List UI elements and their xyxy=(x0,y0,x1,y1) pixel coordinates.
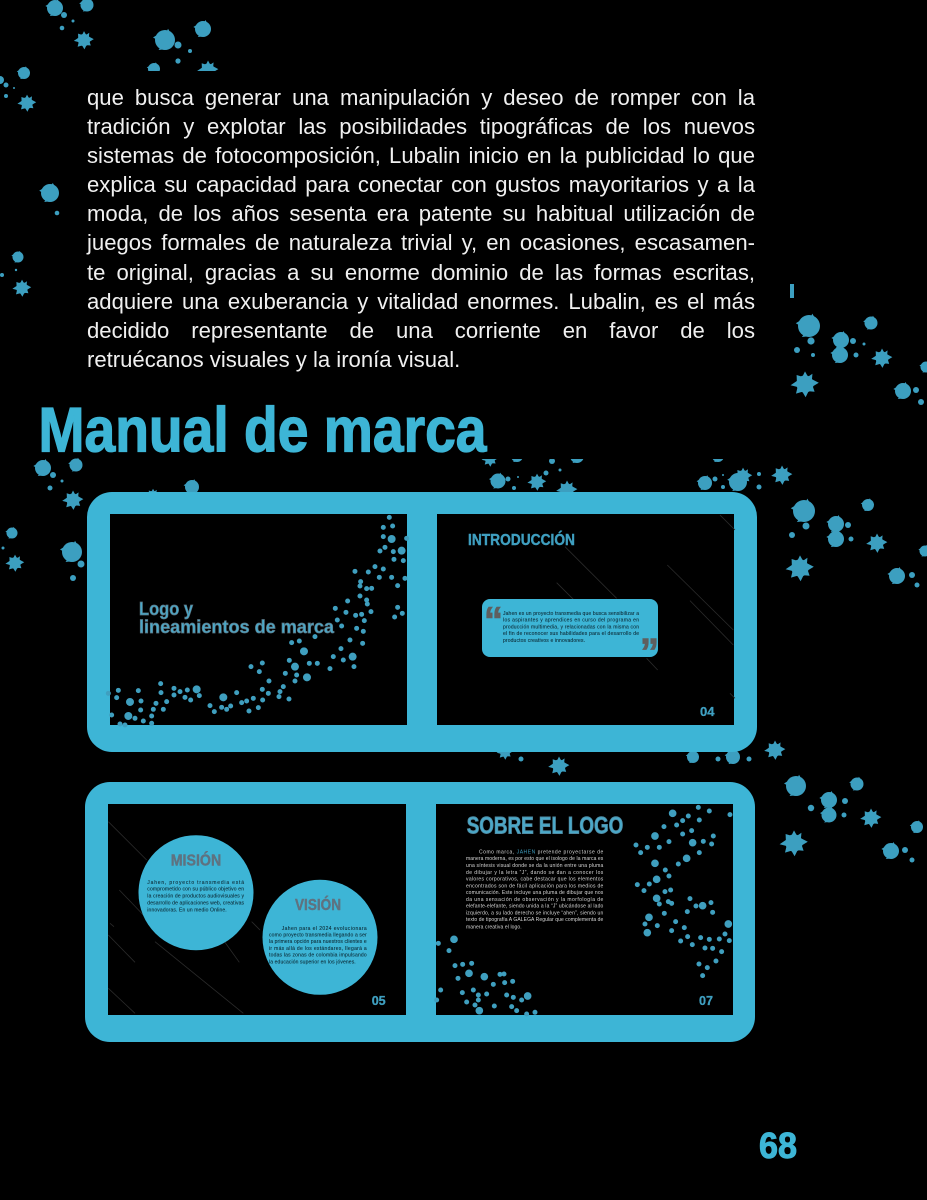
circle: visión: VISIÓN xyxy=(295,896,341,914)
quote box: producción multimedia, y relacionadas con la misma con xyxy=(503,624,639,630)
text block: sobre el logo: izquierdo, a su lado derecho se incluye “ahen”, siendo un xyxy=(466,910,604,916)
circle: misión xyxy=(138,835,254,950)
body paragraph: adquiere una exuberancia y vitalidad enormes. Lubalin, es el más xyxy=(87,289,755,314)
circle: misión: la creación de productos audiovisuales y xyxy=(147,894,244,900)
text block: sobre el logo: manera creativa el logo. xyxy=(466,924,522,930)
body paragraph xyxy=(86,85,756,372)
text block: sobre el logo: texto de tipografía A GALEGA Regular que complementa de xyxy=(466,917,604,923)
page number 07: 07 xyxy=(699,993,713,1008)
circle: misión: innovadoras. En un medio Online. xyxy=(147,908,227,914)
text block: sobre el logo: de dibujar y la letra “J”, dando se dan a conocer los xyxy=(466,870,604,876)
circle: misión: comprometido con su público objetivo en xyxy=(147,887,244,893)
circle: visión: como proyecto transmedia llegando a ser xyxy=(269,932,367,938)
circle: visión: ir más allá de los estándares, llegará a xyxy=(269,946,367,952)
splatter dots: slide 4 xyxy=(437,807,730,1014)
circle: visión: todas las zonas de colombia impulsando xyxy=(269,953,367,959)
quote box xyxy=(482,599,659,674)
slide heading: introducción: INTRODUCCIÓN xyxy=(468,531,575,549)
body paragraph: tradición y explotar las posibilidades tipográficas de los nuevos xyxy=(87,114,755,139)
slide title: logo y lineamientos de marca: Logo y xyxy=(139,598,194,619)
body paragraph: juegos formales de naturaleza trivial y, en ocasiones, escasamen- xyxy=(87,230,755,255)
page number 68: 68 xyxy=(759,1125,797,1166)
circle: visión: la primera opción para nuestros clientes e xyxy=(269,939,367,945)
slide title: logo y lineamientos de marca xyxy=(139,598,335,637)
slide heading: sobre el logo: SOBRE EL LOGO xyxy=(467,812,623,839)
text block: sobre el logo: encontrados son de fácil aplicación para los medios de xyxy=(466,884,604,890)
text block: sobre el logo: valores corporativos, cabe destacar que los elementos xyxy=(466,876,604,882)
quote box: los aspirantes y aprendices en curso del programa en xyxy=(503,618,639,624)
text block: sobre el logo xyxy=(466,850,604,930)
body paragraph: te original, gracias a su enorme dominio de las formas escritas, xyxy=(87,260,755,285)
body paragraph: sistemas de fotocomposición, Lubalin inicio en la publicidad lo que xyxy=(87,143,755,168)
slide title: logo y lineamientos de marca: lineamientos de marca xyxy=(139,616,335,637)
slide: introducción xyxy=(437,514,735,725)
circle: visión: la educación superior en los jóvenes. xyxy=(269,960,356,966)
quote box: Jahen es un proyecto transmedia que busca sensibilizar a xyxy=(503,611,639,617)
text block: sobre el logo: manera moderna, es por esto que el isologo de la marca es xyxy=(466,856,604,862)
text block: sobre el logo: una síntesis visual donde se da la unión entre una pluma xyxy=(466,863,604,869)
body paragraph: explica su capacidad para conectar con gustos mayoritarios y a la xyxy=(87,172,755,197)
quote box: el fin de reconocer sus habilidades para el desarrollo de xyxy=(503,631,639,637)
slide: misión y visión xyxy=(108,804,406,1015)
text block: sobre el logo: da una sensación de observación y la morfología de xyxy=(466,897,604,903)
panel: bottom slide frame xyxy=(85,782,755,1042)
quote box: “ xyxy=(484,600,503,642)
heading: Manual de marca: Manual de marca xyxy=(38,396,487,466)
slide: sobre el logo xyxy=(436,804,733,1015)
circle: visión: Jahen para el 2024 evolucionara xyxy=(282,926,367,932)
circle: misión: desarrollo de aplicaciones web, creativas xyxy=(147,901,244,907)
page number 04: 04 xyxy=(700,704,715,719)
body paragraph: moda, de los años sesenta era patente su habitual utilización de xyxy=(87,201,755,226)
body paragraph: retruécanos visuales y la ironía visual. xyxy=(87,347,460,372)
circle: misión: Jahen, proyecto transmedia está xyxy=(147,880,244,886)
slide: logo y lineamientos xyxy=(108,514,407,725)
circle: misión: MISIÓN xyxy=(171,852,221,870)
body paragraph: que busca generar una manipulación y deseo de romper con la xyxy=(87,85,755,110)
quote box: productos creativos e innovadores. xyxy=(503,638,585,644)
text block: sobre el logo: elefante-elefante, siendo unida a la “J” ubicándose al lado xyxy=(466,904,604,910)
text block: sobre el logo: Como marca, JAHEN pretende proyectarse de xyxy=(479,850,604,856)
quote box: ” xyxy=(640,632,659,674)
page number 05: 05 xyxy=(372,993,386,1008)
panel: top slide frame xyxy=(87,492,757,752)
splatter dots: slide 1 xyxy=(108,517,407,725)
circle: visión xyxy=(262,880,378,995)
body paragraph: decidido representante de una corriente en favor de los xyxy=(87,318,755,343)
text block: sobre el logo: comunicación. Este incluye una pluma de dibujar que nos xyxy=(466,890,604,896)
